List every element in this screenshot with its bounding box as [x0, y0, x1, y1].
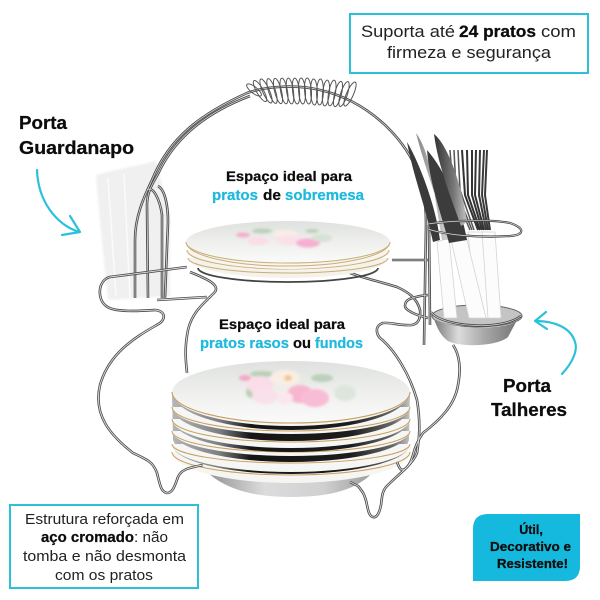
floral pattern: [236, 228, 332, 248]
arrow: to napkin holder: [37, 170, 80, 235]
label: upper shelf: pratos: [212, 188, 258, 204]
label: lower shelf: fundos: [315, 336, 363, 352]
chrome rack: back frame: [135, 87, 430, 345]
napkins: [96, 161, 170, 300]
plate 3: [172, 419, 410, 452]
label: porta talheres: [491, 376, 567, 420]
upper plate stack: [186, 221, 390, 282]
plate 2: [172, 407, 410, 441]
white handles: [437, 232, 501, 318]
badge: útil, decorativo e resistente: Resistente!: [497, 557, 568, 571]
forks: [450, 150, 490, 230]
cup back rim: [432, 305, 522, 327]
arrow: to cutlery holder: [535, 312, 576, 374]
callout: estrutura reforçada: com os pratos: [55, 568, 153, 584]
callout: 24 pratos: Suporta até: [361, 22, 455, 41]
plate 6: [172, 452, 410, 483]
label: porta talheres: Porta: [503, 376, 552, 396]
cutlery holder: [407, 133, 522, 345]
label: upper shelf: Espaço ideal para: [226, 168, 352, 184]
floral pattern: [239, 370, 356, 407]
holder ring: [428, 221, 521, 237]
stack side backing: [172, 392, 410, 470]
label: porta guardanapo: [19, 113, 134, 158]
label: upper shelf: sobremesa: [285, 188, 365, 204]
badge: útil, decorativo e resistente: Útil,: [519, 522, 543, 537]
label: lower shelf: [200, 316, 363, 352]
lower plate stack: [172, 361, 410, 497]
plate 4: [172, 431, 410, 462]
badge: útil, decorativo e resistente: [473, 514, 580, 581]
plate 1: [172, 392, 410, 430]
label: porta guardanapo: Porta: [19, 113, 68, 133]
label: lower shelf: pratos rasos: [200, 336, 289, 352]
label: porta guardanapo: Guardanapo: [19, 138, 134, 158]
label: upper shelf: [212, 168, 365, 204]
callout: 24 pratos: com: [541, 22, 576, 41]
bowl: [205, 470, 375, 497]
label: upper shelf: de: [263, 188, 281, 204]
badge: útil, decorativo e resistente: Decorativo e: [490, 540, 571, 554]
chrome rack: front frame and feet: [98, 267, 460, 517]
callout: estrutura reforçada: Estrutura reforçada em: [25, 512, 184, 528]
label: lower shelf: Espaço ideal para: [219, 316, 345, 332]
callout: estrutura reforçada: tomba e não desmonta: [23, 549, 187, 565]
coil at top of handle: [245, 78, 358, 107]
callout: 24 pratos: firmeza e segurança: [387, 43, 552, 62]
plate 5: [172, 444, 410, 474]
callout: 24 pratos: 24 pratos: [459, 22, 536, 41]
label: porta talheres: Talheres: [491, 400, 567, 420]
callout: estrutura reforçada: : não: [134, 530, 168, 546]
callout: 24 pratos: [350, 14, 588, 73]
knife blades: [407, 142, 440, 242]
callout: estrutura reforçada: [10, 505, 198, 588]
callout: estrutura reforçada: aço cromado: [41, 530, 134, 546]
label: lower shelf: ou: [293, 336, 311, 352]
sauce cup body: [434, 319, 516, 345]
